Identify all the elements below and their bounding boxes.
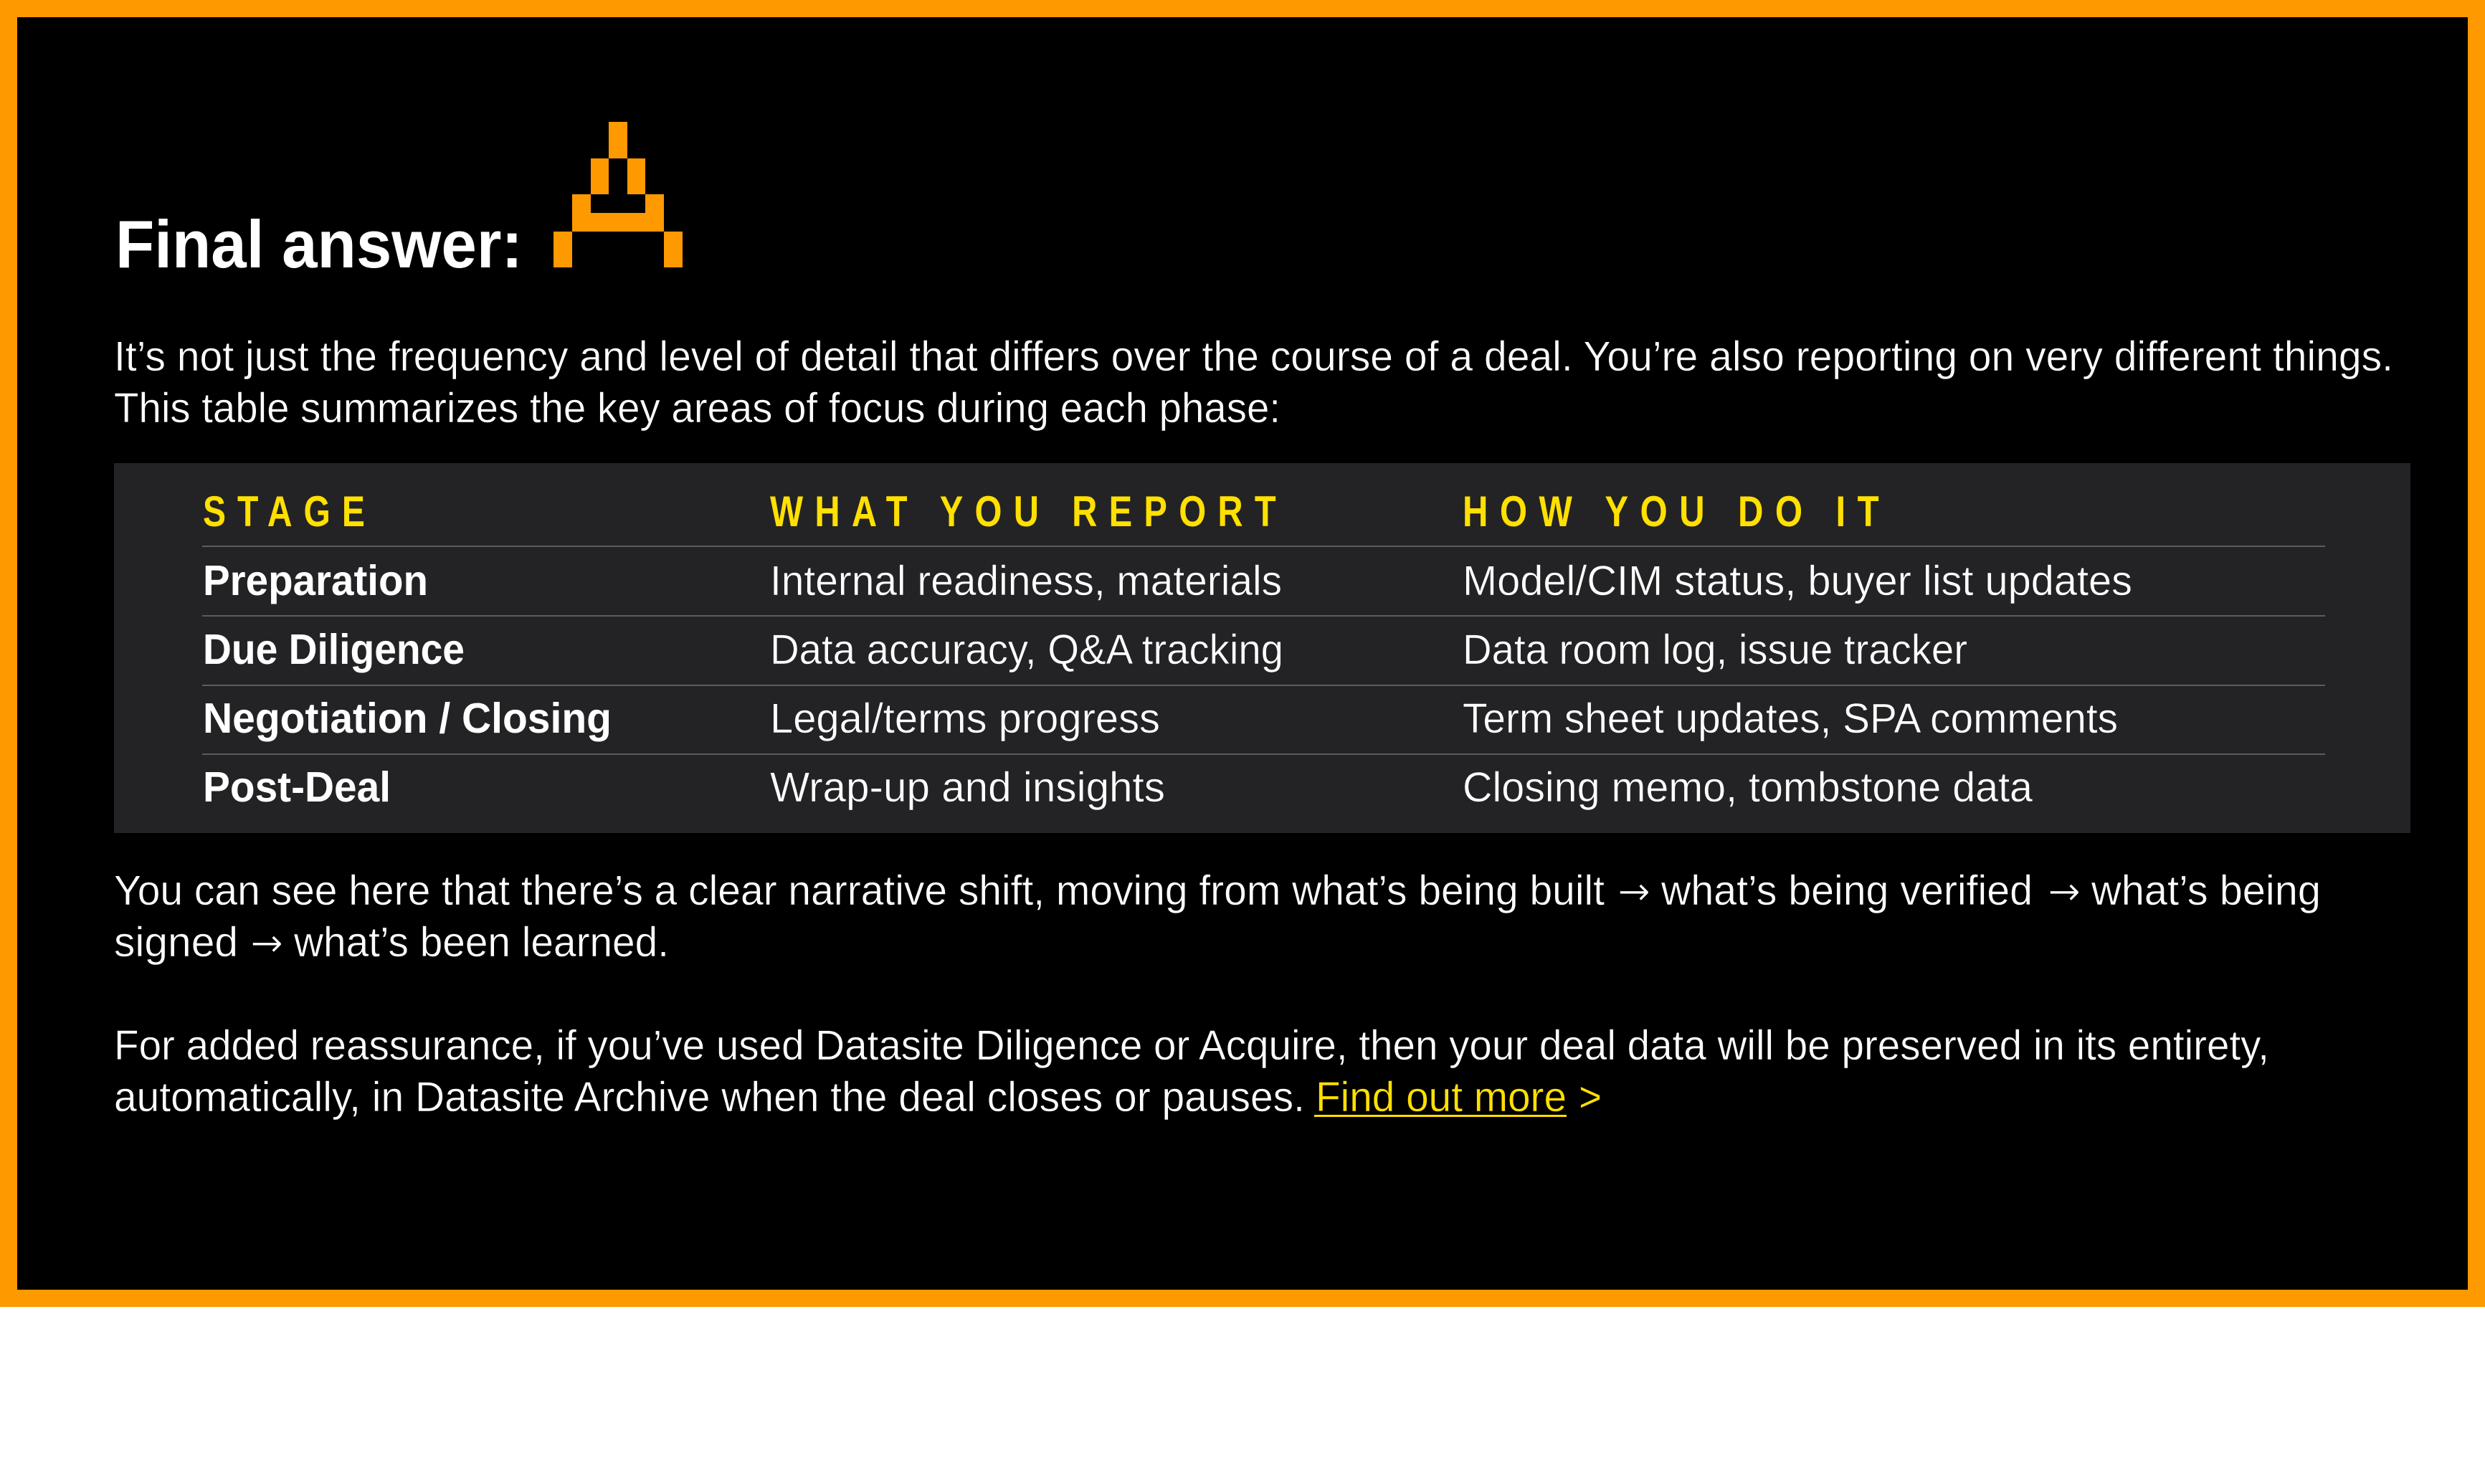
table header row <box>203 487 1891 536</box>
table row: Due Diligence: Data room log, issue tracker <box>1463 627 1967 673</box>
table row: Negotiation / Closing: Negotiation / Closing <box>203 695 612 742</box>
table row: Post-Deal: Wrap-up and insights <box>770 764 1165 811</box>
text block: reassurance: For added reassurance, if you’ve used Datasite Diligence or Acquire, then your deal data will be preserved in its entirety, <box>114 1022 2269 1069</box>
table row: Preparation: Model/CIM status, buyer list updates <box>1463 558 2132 604</box>
link: find out more: Find out more <box>1316 1074 1567 1121</box>
table row: Post-Deal <box>203 764 2033 811</box>
table row: Preparation: Internal readiness, materials <box>770 558 1282 604</box>
text block: narrative shift: what’s been learned. <box>293 919 669 966</box>
text block: reassurance: automatically, in Datasite Archive when the deal closes or pauses. <box>114 1074 1305 1121</box>
text block: intro <box>114 333 2393 432</box>
text block: intro: It’s not just the frequency and level of detail that differs over the course of a deal. You’re also reporting on very different things. <box>114 333 2393 380</box>
text block: intro: This table summarizes the key areas of focus during each phase: <box>114 385 1280 432</box>
table row: Due Diligence: Due Diligence <box>203 626 465 673</box>
text block: narrative shift: You can see here that there’s a clear narrative shift, moving from what’s being built <box>114 867 1605 914</box>
icon: orange pixel A logo <box>553 122 683 267</box>
text block: narrative shift: what’s being verified <box>1660 867 2033 914</box>
text block: narrative shift <box>114 867 2321 966</box>
table header row: STAGE <box>203 487 376 536</box>
table row: Negotiation / Closing: Legal/terms progress <box>770 695 1160 742</box>
panel: stage table <box>114 463 2410 833</box>
table row: Preparation <box>203 557 2132 604</box>
table row: Negotiation / Closing: Term sheet updates, SPA comments <box>1463 695 2118 742</box>
table row: Post-Deal: Closing memo, tombstone data <box>1463 764 2033 811</box>
text block: narrative shift: what’s being <box>2091 867 2321 914</box>
title: Final answer: <box>115 206 523 282</box>
arrow: built to verified: → <box>1617 868 1650 914</box>
text block: reassurance <box>114 1022 2269 1121</box>
table row: Due Diligence: Data accuracy, Q&A tracking <box>770 627 1283 673</box>
table header row: WHAT YOU REPORT <box>770 487 1288 536</box>
table row: Due Diligence <box>203 626 1967 673</box>
link: find out more: > <box>1579 1074 1602 1121</box>
table row: Preparation: Preparation <box>203 557 428 604</box>
table row: Post-Deal: Post-Deal <box>203 764 391 811</box>
text block: narrative shift: signed <box>114 919 238 966</box>
arrow: verified to signed: → <box>2048 868 2081 914</box>
arrow: signed to learned: → <box>250 920 283 966</box>
table row: Negotiation / Closing <box>203 695 2118 742</box>
table header row: HOW YOU DO IT <box>1463 487 1891 536</box>
